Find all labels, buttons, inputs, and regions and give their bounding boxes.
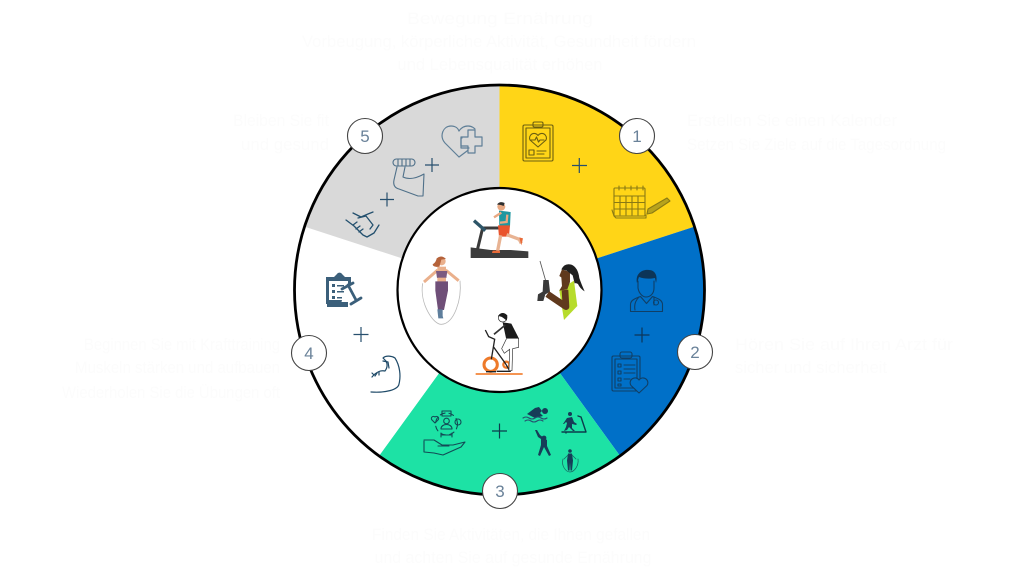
outer ring xyxy=(294,85,704,495)
heading text: top: Vorbeugung, körperliche Aktivität, Gesundheit fördern xyxy=(302,33,696,51)
text block: step 1: Erstellen Sie einen Kalender xyxy=(687,112,898,130)
icon: stretching person xyxy=(535,430,551,456)
text block: step 2: Hören Sie auf Ihren Arzt für xyxy=(735,336,954,354)
text block: step 5: Bleiben Sie fit xyxy=(233,112,329,130)
text block: step 4: Wiederholen Sie die Übungen oft xyxy=(62,384,280,402)
segment 1: yellow xyxy=(500,85,694,258)
heading text: top: und Lebensqualität erhöhen xyxy=(398,56,602,74)
text block: step 1 xyxy=(687,112,946,154)
text block: step 5 xyxy=(233,112,329,154)
icon: handshake xyxy=(346,212,379,237)
icon: heart with medical cross xyxy=(442,126,482,157)
icon: jump rope person xyxy=(563,449,578,472)
text block: step 2 xyxy=(735,336,954,377)
text block: step 3: und achten Sie auf gesunde Ernährung xyxy=(374,549,652,567)
badge 3: 3 xyxy=(495,482,505,501)
heading text: top xyxy=(302,10,696,74)
badge 2 xyxy=(678,334,712,370)
badge 1 xyxy=(620,118,654,154)
figure: woman with cable handle xyxy=(537,261,585,320)
segment 4: white xyxy=(294,227,440,456)
text block: step 2: sicher und sicherheit xyxy=(735,359,887,377)
icon: clipboard with health heart xyxy=(612,352,648,393)
donut chart: five segments xyxy=(294,85,705,495)
text block: step 3 xyxy=(372,526,652,567)
plus: gray upper xyxy=(425,158,439,172)
badge 2: 2 xyxy=(690,343,700,362)
plus: blue xyxy=(634,328,650,342)
text block: step 4: Muskeln stärken und aufbauen xyxy=(75,359,280,377)
figure: treadmill runner xyxy=(471,202,528,258)
text block: step 5: und gesund xyxy=(241,136,329,154)
text block: step 4: Beginnen Sie mit Krafttraining xyxy=(84,336,280,354)
icon: hand holding healthy habits xyxy=(424,411,465,455)
text block: step 4 xyxy=(62,336,280,402)
icon: treadmill runner xyxy=(562,412,586,433)
figure: man on exercise bike xyxy=(476,313,523,374)
figure: woman jumping rope xyxy=(422,256,460,324)
icon: arm lifting dumbbell xyxy=(393,159,424,196)
plus: green xyxy=(492,424,507,438)
badge 4: 4 xyxy=(304,344,314,363)
plus: yellow xyxy=(572,158,587,173)
segment 5: gray xyxy=(304,85,500,258)
badge 3 xyxy=(482,474,518,508)
icon: clipboard with heart xyxy=(523,122,553,161)
text block: step 3: Finden Sie Aktivitäten, die Ihnen gefallen xyxy=(372,526,650,544)
text block: step 1: Setzen Sie Ziele auf die Tagesordnung xyxy=(687,136,946,154)
badge 4 xyxy=(292,336,326,370)
badge 1: 1 xyxy=(632,127,642,146)
badge 5: 5 xyxy=(360,127,370,146)
icon: workout plan clipboard with dumbbell xyxy=(326,273,361,307)
heading text: top: Bewegung Ernährung xyxy=(407,10,593,28)
badge 5 xyxy=(348,118,382,154)
icon: calendar with pencil xyxy=(612,186,670,218)
icon: swimmer xyxy=(523,407,548,422)
icon: flexed muscle xyxy=(371,356,400,392)
segment 2: blue xyxy=(560,227,705,456)
icon: doctor xyxy=(630,270,662,312)
plus: gray lower xyxy=(380,192,394,206)
inner circle xyxy=(398,188,602,392)
plus: white segment xyxy=(354,327,368,342)
segment 3: green xyxy=(379,372,620,495)
